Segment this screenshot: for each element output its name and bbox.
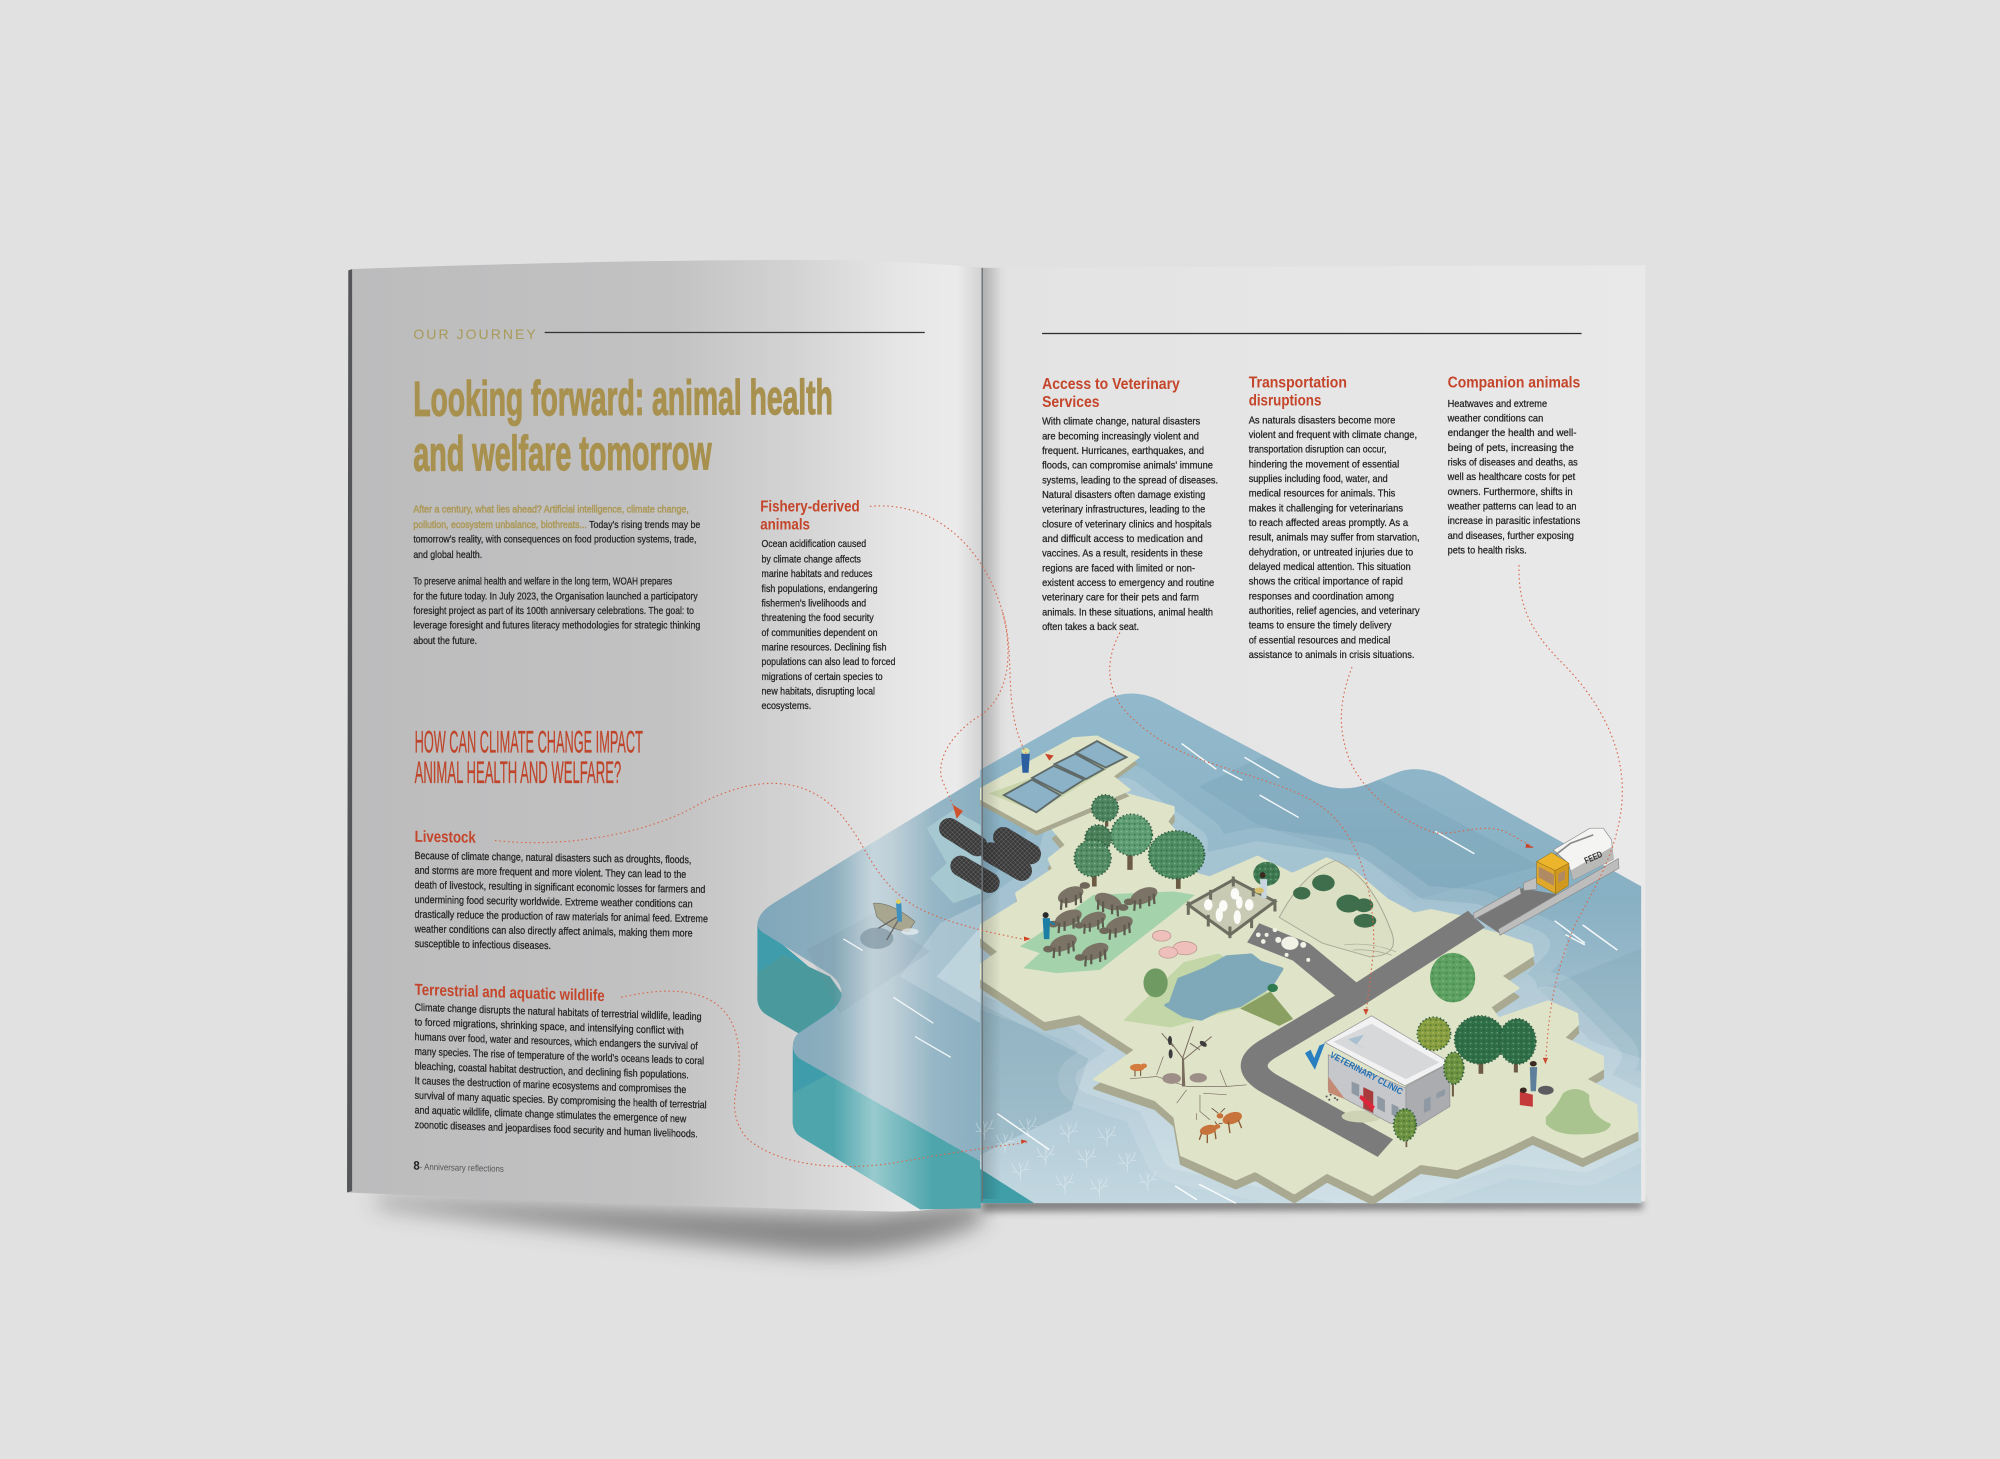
text block: transportation disruptions: supplies including food, water, and — [1249, 474, 1388, 485]
veterinary clinic scene — [1305, 1009, 1505, 1147]
clinic signage: VETERINARY CLINIC — [1328, 1050, 1405, 1097]
text block: fishery-derived animals: by climate change affects — [762, 554, 861, 565]
text block: access to veterinary services: often takes a back seat. — [1042, 622, 1139, 633]
intro text: tomorrow's reality, with consequences on food production systems, trade, — [413, 535, 696, 546]
panel: left page — [348, 260, 982, 1212]
text block: companion animals: risks of diseases and deaths, as — [1448, 458, 1578, 469]
text block: access to veterinary services: Access to Veterinary — [1042, 375, 1180, 393]
text block: transportation disruptions: result, animals may suffer from starvation, — [1249, 533, 1420, 544]
text block: companion animals: well as healthcare costs for pet — [1447, 472, 1575, 483]
ocean surface — [757, 777, 981, 1162]
panel: right page — [982, 265, 1645, 1203]
text block: companion animals: and diseases, further exposing — [1448, 531, 1574, 542]
illustration: island map on right page — [980, 694, 1641, 1204]
text block: access to veterinary services — [1042, 375, 1218, 633]
icon: poultry farmer with bush — [1253, 862, 1280, 898]
text block: companion animals: owners. Furthermore, shifts in — [1448, 487, 1573, 498]
text block: terrestrial and aquatic wildlife: humans over food, water and resources, which endangers the survival of — [415, 1032, 698, 1052]
text block: transportation disruptions: Transportation — [1249, 374, 1347, 392]
panel: left page bound edge — [347, 269, 352, 1192]
text block: companion animals: weather patterns can lead to an — [1447, 502, 1577, 513]
text block: companion animals: pets to health risks. — [1448, 546, 1527, 557]
title: and welfare tomorrow — [413, 426, 712, 482]
text block: terrestrial and aquatic wildlife — [415, 981, 707, 1141]
text block: access to veterinary services: vaccines. As a result, residents in these — [1042, 549, 1203, 560]
text block: fishery-derived animals: Ocean acidification caused — [762, 539, 866, 550]
arrow to pasture — [1024, 937, 1031, 941]
intro text: foresight project as part of its 100th anniversary celebrations. The goal: to — [413, 606, 694, 617]
text block: terrestrial and aquatic wildlife: to forced migrations, shrinking space, and intensifying conflict with — [415, 1017, 684, 1037]
cab — [1537, 853, 1569, 894]
pond — [1123, 954, 1293, 1028]
fish tank platform — [980, 737, 1138, 836]
text block: fishery-derived animals: threatening the food security — [762, 613, 874, 624]
water depth zones — [980, 738, 1641, 1195]
text block: transportation disruptions: teams to ensure the timely delivery — [1249, 621, 1392, 632]
text block: fishery-derived animals: new habitats, disrupting local — [762, 686, 875, 697]
text block: access to veterinary services: systems, leading to the spread of diseases. — [1042, 475, 1218, 486]
text block: access to veterinary services: existent access to emergency and routine — [1042, 578, 1214, 589]
text block: transportation disruptions: disruptions — [1249, 392, 1321, 410]
tank: FEED — [1583, 849, 1604, 866]
text block: fishery-derived animals: marine habitats and reduces — [762, 569, 872, 580]
text block: access to veterinary services: closure of veterinary clinics and hospitals — [1042, 519, 1212, 530]
text block: fishery-derived animals: migrations of certain species to — [762, 672, 883, 683]
bridge — [1473, 859, 1619, 935]
intro text: leverage foresight and futures literacy methodologies for strategic thinking — [413, 621, 700, 632]
section label: OUR JOURNEY — [413, 326, 536, 342]
clinic trees — [1394, 1016, 1505, 1147]
text block: access to veterinary services: and difficult access to medication and — [1042, 534, 1203, 545]
text block: livestock: Because of climate change, natural disasters such as droughts, floods, — [415, 851, 691, 866]
brochure spread: ANIMAL HEALTH AND WELFARE? — [415, 755, 621, 790]
text block: companion animals: endanger the health and well- — [1448, 428, 1577, 439]
text block: access to veterinary services: Services — [1042, 393, 1100, 411]
text block: fishery-derived animals: marine resources. Declining fish — [762, 642, 887, 653]
cattle herd — [1043, 882, 1160, 966]
text block: access to veterinary services: are becoming increasingly violent and — [1042, 431, 1199, 442]
intro text: After a century, what lies ahead? Artificial intelligence, climate change, — [413, 505, 689, 516]
icon: farmer — [1043, 912, 1055, 939]
building — [1305, 1016, 1450, 1128]
text block: livestock: drastically reduce the production of raw materials for animal feed. Extreme — [415, 910, 708, 925]
text block: transportation disruptions: authorities, relief agencies, and veterinary — [1249, 606, 1420, 617]
right page top rule — [1042, 333, 1582, 334]
icon: fish cages — [927, 810, 1031, 903]
page footer: - Anniversary reflections — [420, 1162, 504, 1174]
text block: transportation disruptions: hindering the movement of essential — [1249, 459, 1399, 470]
text block: fishery-derived animals: of communities dependent on — [762, 628, 878, 639]
grass pasture — [1020, 892, 1195, 973]
text block: terrestrial and aquatic wildlife: bleaching, coastal habitat destruction, and declining fish populations. — [415, 1061, 689, 1081]
title: Looking forward: animal health — [413, 371, 833, 427]
intro text: pollution, ecosystem unbalance, biothreats... Today's rising trends may be — [413, 520, 700, 531]
text block: fishery-derived animals: Fishery-derived — [760, 497, 860, 515]
feed truck on bridge — [1473, 828, 1619, 935]
text block: terrestrial and aquatic wildlife: Climate change disrupts the natural habitats of terrestrial wildlife, leading — [415, 1003, 702, 1023]
tank — [1553, 828, 1613, 880]
text block: companion animals: Companion animals — [1448, 374, 1580, 392]
text block: transportation disruptions: delayed medical attention. This situation — [1249, 562, 1411, 573]
drought cattle — [1162, 1073, 1207, 1084]
intro text: and global health. — [413, 550, 482, 561]
text block: transportation disruptions: As naturals disasters become more — [1249, 415, 1396, 426]
text block: livestock: undermining food security worldwide. Extreme weather conditions can — [415, 895, 693, 910]
brochure spread — [347, 260, 1647, 1269]
text block: companion animals: increase in parasitic infestations — [1448, 516, 1580, 527]
text block: transportation disruptions: of essential resources and medical — [1249, 635, 1390, 646]
text block: fishery-derived animals: fishermen's livelihoods and — [762, 598, 866, 609]
text block: transportation disruptions: to reach affected areas promptly. As a — [1249, 518, 1408, 529]
title — [413, 371, 833, 482]
text block: terrestrial and aquatic wildlife: many species. The rise of temperature of the world's oceans leads to coral — [415, 1047, 704, 1067]
text block: companion animals: being of pets, increasing the — [1448, 443, 1574, 454]
text block: companion animals: Heatwaves and extreme — [1448, 399, 1547, 410]
dotted connector lines — [495, 506, 1622, 1167]
text block: transportation disruptions: makes it challenging for veterinarians — [1249, 503, 1403, 514]
dead tree and cracked ground — [1130, 1027, 1247, 1120]
text block: transportation disruptions: responses and coordination among — [1249, 591, 1394, 602]
ocean surface — [980, 694, 1641, 1203]
route arrows on map — [1021, 754, 1548, 1144]
ocean side walls — [757, 923, 981, 1209]
text block: transportation disruptions: medical resources for animals. This — [1249, 489, 1395, 500]
text block: terrestrial and aquatic wildlife: Terrestrial and aquatic wildlife — [415, 981, 605, 1005]
icon: rowing boat — [860, 899, 919, 949]
bamboo thicket — [1430, 953, 1475, 1002]
page footer: 8 — [413, 1158, 420, 1173]
text block: fishery-derived animals: populations can also lead to forced — [762, 657, 896, 668]
island land — [980, 793, 1637, 1195]
light sheen — [838, 814, 926, 1209]
text block: fishery-derived animals — [760, 497, 896, 712]
green meadow — [1546, 1089, 1611, 1135]
text block: terrestrial and aquatic wildlife: and aquatic wildlife, climate change stimulates the emergence of new — [415, 1105, 687, 1125]
text block: access to veterinary services: With climate change, natural disasters — [1042, 417, 1200, 428]
connector arrowhead on left page — [953, 805, 963, 819]
water streaks — [997, 743, 1617, 1203]
farm scene — [1020, 795, 1310, 973]
text block: terrestrial and aquatic wildlife: zoonotic diseases and jeopardises food security and human livelihoods. — [415, 1120, 698, 1140]
text block: access to veterinary services: frequent. Hurricanes, earthquakes, and — [1042, 446, 1204, 457]
illustration: ocean on left page — [757, 760, 981, 1210]
intro text: about the future. — [413, 636, 477, 647]
road — [1253, 919, 1476, 1148]
section heading — [415, 724, 643, 790]
text block: access to veterinary services: floods, can compromise animals' immune — [1042, 461, 1213, 472]
landslide rubble — [1256, 928, 1310, 962]
fox — [1130, 1063, 1147, 1076]
text block: transportation disruptions — [1249, 374, 1420, 661]
drop shadow under brochure — [376, 1196, 1643, 1254]
text block: access to veterinary services: veterinary infrastructures, leading to the — [1042, 505, 1205, 516]
intro text: for the future today. In July 2023, the Organisation launched a participatory — [413, 591, 698, 602]
text block: companion animals: weather conditions can — [1447, 414, 1543, 425]
text block: transportation disruptions: dehydration, or untreated injuries due to — [1249, 547, 1413, 558]
pigs — [1152, 931, 1197, 958]
island side wall — [980, 802, 1637, 1204]
text block: transportation disruptions: transportation disruption can occur, — [1249, 445, 1386, 456]
text block: terrestrial and aquatic wildlife: survival of many aquatic species. By compromising the health of terrestrial — [415, 1091, 707, 1111]
intro text: To preserve animal health and welfare in the long term, WOAH prepares — [413, 577, 672, 588]
pet owners and dog — [1520, 1061, 1554, 1107]
shallow water steps — [900, 903, 981, 1023]
spine shadow — [982, 268, 1001, 1201]
trees — [1074, 795, 1205, 889]
text block: livestock: Livestock — [415, 828, 476, 847]
arrow to clinic — [1363, 1009, 1369, 1015]
hill with landslide — [1279, 861, 1396, 957]
text block: access to veterinary services: animals. In these situations, animal health — [1042, 607, 1213, 618]
deer — [1199, 1108, 1244, 1143]
text block: access to veterinary services: veterinary care for their pets and farm — [1042, 593, 1199, 604]
text block: access to veterinary services: regions are faced with limited or non- — [1042, 563, 1196, 574]
text block: transportation disruptions: assistance to animals in crisis situations. — [1249, 650, 1414, 661]
second park tree — [1499, 1019, 1536, 1072]
text block: livestock — [414, 828, 708, 955]
text block: terrestrial and aquatic wildlife: It causes the destruction of marine ecosystems and compromises the — [415, 1076, 686, 1096]
text block: transportation disruptions: violent and frequent with climate change, — [1249, 430, 1417, 441]
text block: fishery-derived animals: ecosystems. — [762, 701, 811, 712]
text block: fishery-derived animals: fish populations, endangering — [762, 584, 878, 595]
text block: transportation disruptions: shows the critical importance of rapid — [1249, 577, 1403, 588]
text block: companion animals — [1447, 374, 1580, 557]
text block: fishery-derived animals: animals — [760, 515, 810, 533]
text block: livestock: weather conditions can also directly affect animals, making them more — [414, 924, 693, 940]
brochure spread: HOW CAN CLIMATE CHANGE IMPACT — [415, 724, 643, 759]
teal wall wedge — [980, 1169, 1034, 1203]
water streaks — [843, 939, 951, 1057]
text block: livestock: and storms are more frequent and more violent. They can lead to the — [415, 866, 686, 881]
intro text — [413, 505, 700, 647]
page footer — [413, 1158, 504, 1175]
drought scene: dead tree, cracks and wildlife — [1130, 1027, 1247, 1143]
crows — [1168, 1036, 1208, 1058]
text block: livestock: susceptible to infectious diseases. — [415, 939, 551, 952]
bleached corals — [976, 1117, 1157, 1198]
poultry pen — [1188, 877, 1275, 938]
text block: access to veterinary services: Natural disasters often damage existing — [1042, 490, 1205, 501]
text block: livestock: death of livestock, resulting in significant economic losses for farmers and — [415, 880, 706, 896]
